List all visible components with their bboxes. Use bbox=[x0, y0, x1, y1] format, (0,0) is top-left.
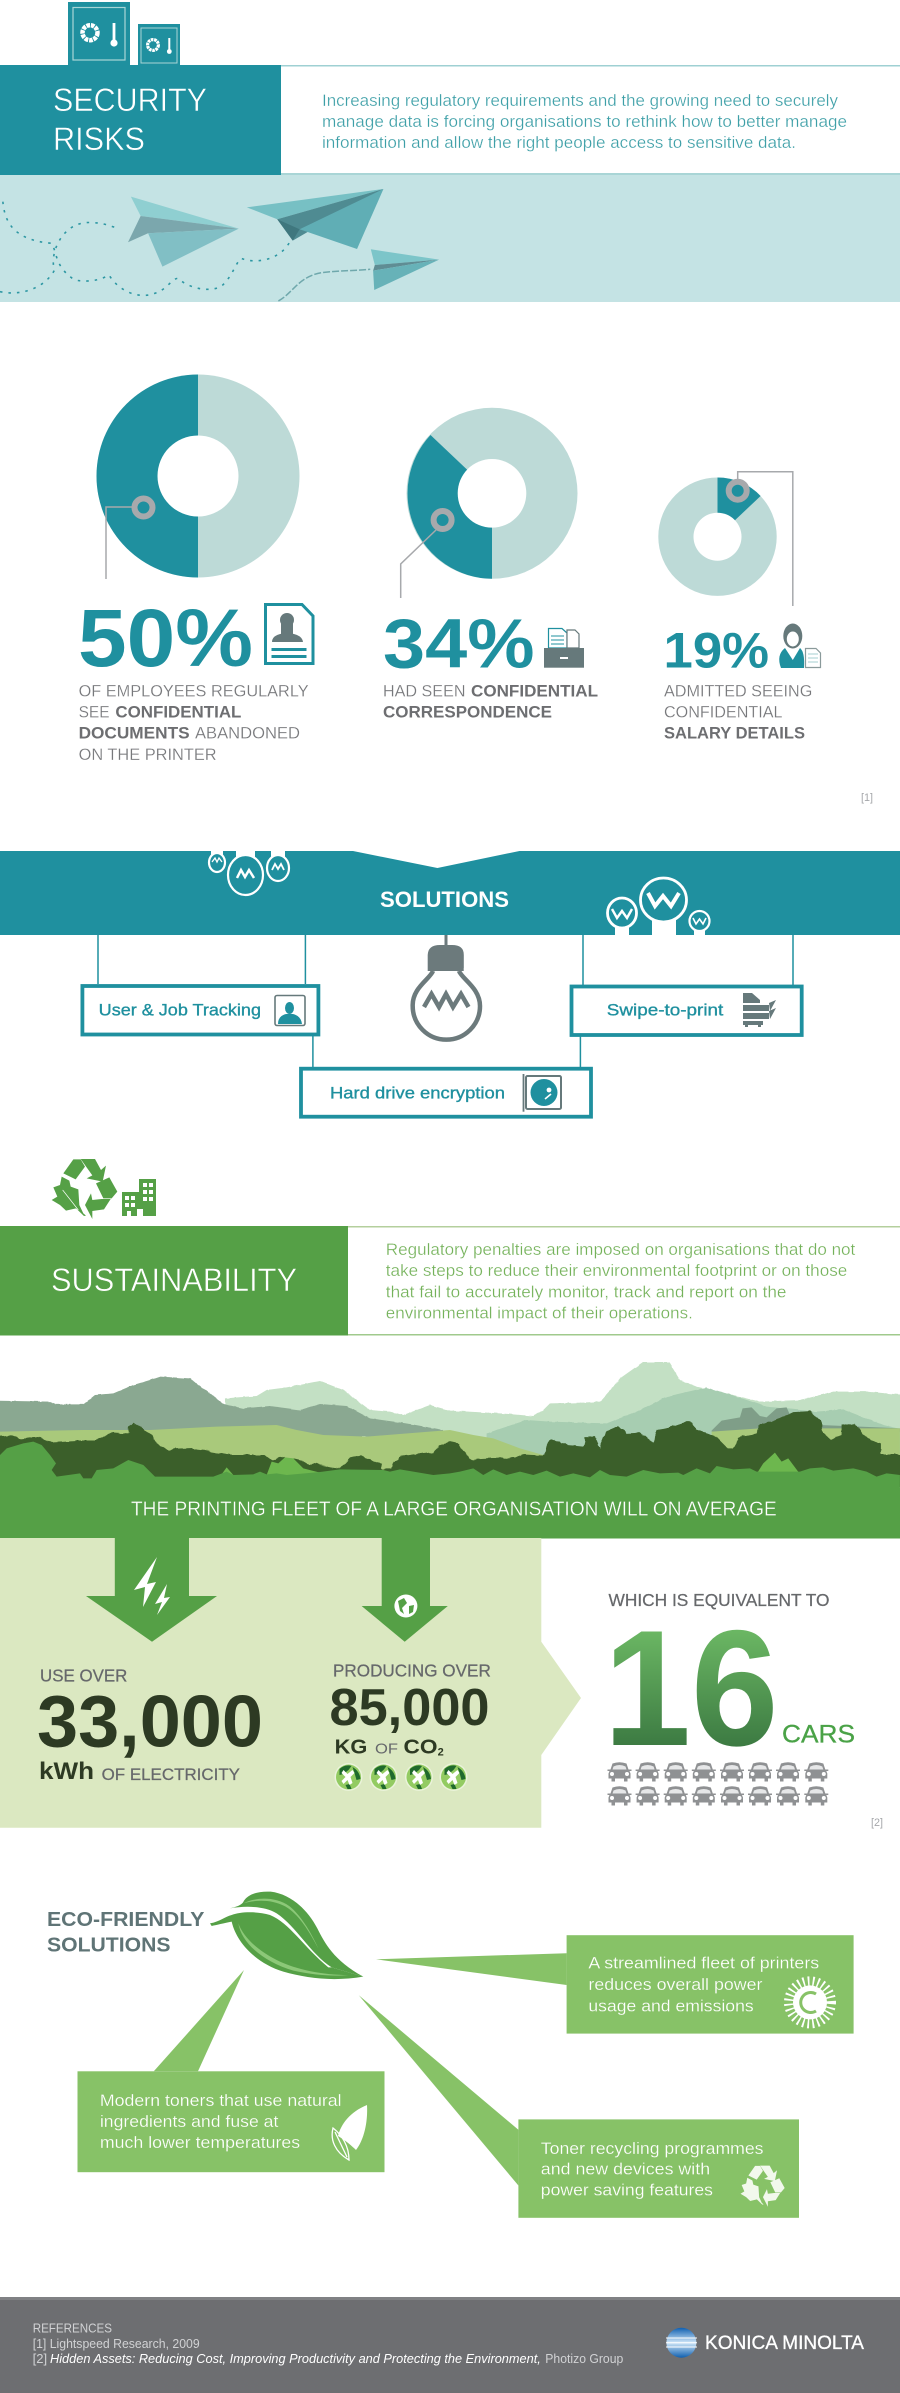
icon: hanging bulbs bbox=[209, 851, 289, 895]
icon: hard drive bbox=[524, 1074, 561, 1112]
stat: carbon emissions: 85,000 bbox=[330, 1679, 490, 1737]
dashed flight trail bbox=[0, 202, 290, 295]
footer bbox=[0, 2297, 900, 2393]
icon grid: cars bbox=[608, 1762, 828, 1806]
caption: 34%: HAD SEEN bbox=[383, 683, 466, 701]
icon: printer bbox=[743, 993, 776, 1027]
intro text: Increasing regulatory requirements and the growing need to securely bbox=[322, 92, 839, 110]
solution box: hard drive encryption: Hard drive encryption bbox=[330, 1083, 505, 1102]
references: [2] bbox=[33, 2351, 47, 2366]
icon: small safe bbox=[138, 24, 180, 65]
stat: carbon emissions: CO bbox=[404, 1736, 438, 1758]
caption: 50%: CONFIDENTIAL bbox=[115, 704, 241, 722]
callout: toner recycling: and new devices with bbox=[541, 2160, 710, 2179]
icon: central light bulb bbox=[413, 935, 480, 1040]
icon: recycling leaf bbox=[52, 1159, 117, 1219]
heading: eco-friendly solutions: SOLUTIONS bbox=[47, 1934, 170, 1956]
icon: lightning bbox=[134, 1557, 170, 1615]
stat: 19%: 19% bbox=[664, 622, 769, 678]
heading panel: sustainability bbox=[0, 1226, 348, 1336]
icon: personnel document bbox=[266, 604, 313, 664]
intro text bbox=[386, 1241, 856, 1322]
solutions banner: SOLUTIONS bbox=[380, 887, 509, 912]
panel: fleet band: THE PRINTING FLEET OF A LARGE ORGANISATION WILL ON AVERAGE bbox=[131, 1499, 777, 1521]
solution box: hard drive encryption bbox=[301, 1069, 591, 1117]
icon: globe bbox=[394, 1594, 417, 1618]
caption: 50%: ON THE PRINTER bbox=[79, 746, 217, 764]
caption: 19%: CONFIDENTIAL bbox=[664, 704, 782, 722]
caption: 19% bbox=[664, 683, 812, 743]
callout: modern toners: Modern toners that use natural bbox=[100, 2091, 342, 2110]
logo: Konica Minolta bbox=[666, 2328, 864, 2358]
panel: energy stats bbox=[0, 1538, 581, 1828]
security header band bbox=[0, 65, 900, 176]
stat: carbon emissions: KG bbox=[335, 1736, 367, 1758]
stat: electricity use: kWh bbox=[39, 1758, 94, 1785]
callout: modern toners: ingredients and fuse at bbox=[100, 2112, 279, 2131]
caption: 50%: OF EMPLOYEES REGULARLY bbox=[79, 683, 309, 701]
stat: 16 cars: CARS bbox=[782, 1721, 855, 1749]
solution box: swipe to print: Swipe-to-print bbox=[607, 1001, 724, 1020]
icon: recycle bbox=[741, 2166, 785, 2207]
references: Photizo Group bbox=[545, 2351, 623, 2366]
connector lines bbox=[98, 935, 793, 1067]
label: equivalent: WHICH IS EQUIVALENT TO bbox=[608, 1590, 830, 1610]
references bbox=[33, 2321, 623, 2366]
caption: 34% bbox=[383, 683, 598, 722]
callout: streamlined fleet bbox=[376, 1935, 854, 2034]
caption: 50% bbox=[79, 683, 309, 764]
stat: electricity use: 33,000 bbox=[37, 1682, 263, 1763]
paper plane 3 bbox=[371, 249, 439, 290]
stat: 16 cars: 16 bbox=[604, 1596, 778, 1780]
arrow: electricity bbox=[86, 1538, 217, 1642]
icon: leaf outline bbox=[332, 2105, 367, 2160]
heading panel: security risks bbox=[0, 65, 281, 175]
logo: Konica Minolta: KONICA MINOLTA bbox=[705, 2333, 864, 2354]
intro text bbox=[322, 92, 847, 152]
stat: 34%: 34% bbox=[383, 604, 534, 682]
donut chart: 50% bbox=[96, 374, 300, 579]
donut chart: 34% bbox=[401, 408, 578, 598]
intro text: that fail to accurately monitor, track and report on the bbox=[386, 1283, 786, 1301]
callout: toner recycling bbox=[359, 1995, 799, 2218]
solution box: user and job tracking bbox=[82, 986, 318, 1034]
icon: green building bbox=[122, 1179, 156, 1216]
panel: fleet band bbox=[0, 1488, 900, 1538]
caption: 50%: SEE bbox=[79, 704, 110, 722]
stat: carbon emissions bbox=[330, 1661, 491, 1758]
intro text: information and allow the right people access to sensitive data. bbox=[322, 134, 796, 152]
landscape illustration bbox=[0, 1362, 900, 1493]
paper plane 2 bbox=[247, 189, 383, 249]
callout: streamlined fleet: reduces overall power bbox=[588, 1975, 763, 1994]
reference marker 1: [1] bbox=[861, 792, 873, 804]
arrow: emissions bbox=[362, 1538, 448, 1642]
solution box: user and job tracking: User & Job Tracking bbox=[99, 1001, 261, 1020]
reference marker 2: [2] bbox=[871, 1817, 883, 1829]
heading: eco-friendly solutions: ECO-FRIENDLY bbox=[47, 1909, 205, 1931]
heading panel: security risks: SECURITY bbox=[53, 82, 207, 118]
icon row: globes bbox=[334, 1763, 468, 1791]
callout: toner recycling: Toner recycling programmes bbox=[541, 2139, 764, 2158]
stat: carbon emissions: OF bbox=[375, 1740, 398, 1757]
icon: standing bulbs bbox=[608, 878, 710, 935]
callout: modern toners bbox=[78, 1970, 384, 2172]
paper plane 1 bbox=[128, 197, 239, 267]
heading panel: security risks: RISKS bbox=[53, 121, 145, 157]
solution box: swipe to print bbox=[572, 986, 802, 1035]
intro text: take steps to reduce their environmental footprint or on those bbox=[386, 1262, 847, 1280]
callout: streamlined fleet: usage and emissions bbox=[588, 1996, 754, 2015]
icon: user badge bbox=[275, 996, 305, 1026]
caption: 19%: ADMITTED SEEING bbox=[664, 683, 812, 701]
callout: streamlined fleet: A streamlined fleet of printers bbox=[588, 1954, 819, 1973]
caption: 34%: CORRESPONDENCE bbox=[383, 704, 552, 722]
caption: 50%: ABANDONED bbox=[195, 725, 300, 743]
references: REFERENCES bbox=[33, 2321, 112, 2336]
stat: carbon emissions: PRODUCING OVER bbox=[333, 1661, 491, 1681]
sustainability header bbox=[0, 1226, 900, 1336]
icon: leaf bbox=[210, 1892, 363, 1979]
references: Hidden Assets: Reducing Cost, Improving Productivity and Protecting the Environment, bbox=[50, 2351, 541, 2366]
donut chart: 19% bbox=[658, 472, 793, 606]
icon: filing cabinet bbox=[544, 628, 584, 668]
caption: 50%: DOCUMENTS bbox=[79, 725, 190, 743]
icon: woman with document bbox=[779, 624, 820, 668]
heading panel: sustainability: SUSTAINABILITY bbox=[51, 1262, 297, 1298]
intro text: Regulatory penalties are imposed on organisations that do not bbox=[386, 1241, 856, 1259]
intro text: environmental impact of their operations. bbox=[386, 1304, 693, 1322]
intro text: manage data is forcing organisations to rethink how to better manage bbox=[322, 113, 847, 131]
stat: electricity use: OF ELECTRICITY bbox=[102, 1765, 240, 1784]
stat: 50%: 50% bbox=[78, 593, 253, 684]
stat: electricity use: USE OVER bbox=[40, 1666, 127, 1686]
stat: electricity use bbox=[37, 1666, 263, 1785]
references: [1] Lightspeed Research, 2009 bbox=[33, 2336, 200, 2351]
caption: 19%: SALARY DETAILS bbox=[664, 725, 805, 743]
icon: large safe bbox=[68, 2, 130, 65]
paper planes banner bbox=[0, 175, 900, 302]
solutions banner bbox=[0, 851, 900, 935]
callout: modern toners: much lower temperatures bbox=[100, 2133, 300, 2152]
caption: 34%: CONFIDENTIAL bbox=[471, 683, 598, 701]
stat: carbon emissions: 2 bbox=[438, 1746, 444, 1758]
heading: eco-friendly solutions bbox=[47, 1909, 205, 1956]
callout: toner recycling: power saving features bbox=[541, 2180, 713, 2200]
icon: sun bbox=[790, 1982, 830, 2022]
